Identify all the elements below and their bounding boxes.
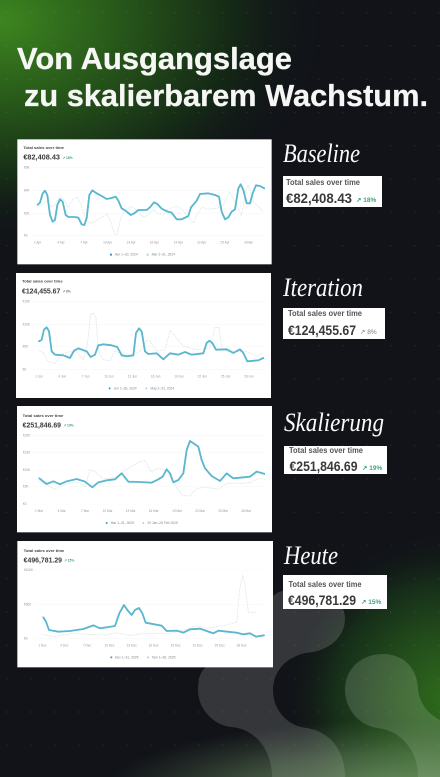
line chart: 16 Mar [149,509,159,513]
title [17,41,428,113]
line chart: 1 Dec [38,643,47,647]
summary box: skalierung [284,445,387,474]
line chart: 22 Dec [193,643,203,647]
summary box: heute: ↗ 15% [361,599,381,606]
line chart: 1 Apr [34,241,41,245]
chart title: Total sales over time [22,280,63,284]
chart value: €124,455.67 [22,288,60,295]
line chart: 25 Mar [218,509,228,513]
summary box: skalierung: €251,846.69 [290,458,358,474]
line chart: €100K [24,568,34,572]
chart title: Total sales over time [24,549,64,553]
line chart: 7 Apr [80,241,88,245]
line chart: 10 Apr [103,241,112,245]
legend: 29 Jan–28 Feb 2025 [147,521,178,525]
legend: Mar 2–31, 2024 [152,253,175,257]
panel: heute chart [17,541,273,667]
line chart: 22 Jun [198,375,207,379]
line chart: 10 Mar [103,509,113,513]
line chart: 19 Dec [171,643,181,647]
line chart: €0 [23,367,26,371]
line chart: €0 [24,234,28,238]
chart change: ↗ 8% [62,290,71,294]
line chart: 7 Jun [82,375,90,379]
title: zu skalierbarem Wachstum. [24,78,428,113]
legend [106,521,178,525]
line chart: 19 Apr [174,241,183,245]
legend: Jun 1–30, 2024 [114,386,137,390]
line chart: 1 Mar [35,509,43,513]
title: Von Ausgangslage [17,41,292,76]
line chart: €10K [23,322,31,326]
panel: skalierung chart [17,406,272,532]
line chart [24,568,265,647]
heading: Baseline: Baseline [283,139,360,168]
line chart: 1 Jun [35,375,43,379]
line chart [23,299,265,379]
summary box: baseline [283,176,382,207]
chart value: €251,846.69 [23,423,61,430]
line chart [23,433,265,513]
line chart: 16 Apr [150,241,159,245]
line chart: 10 Jun [104,375,114,379]
heading: Iteration: Iteration [282,273,363,302]
summary box: iteration: ↗ 8% [360,329,377,336]
line chart: 13 Mar [126,509,136,513]
line chart: 19 Mar [172,509,182,513]
line chart: €15K [23,299,31,303]
legend [110,655,176,659]
line chart: 10 Dec [104,643,115,647]
summary box: iteration: €124,455.67 [288,322,356,338]
line chart: €10K [23,468,31,472]
line chart: 28 Apr [244,241,253,245]
line chart: €0 [23,502,27,506]
line chart: 25 Jun [221,375,231,379]
line chart: 16 Jun [151,375,161,379]
chart change: ↗ 19% [63,424,74,428]
line chart: 4 Mar [58,509,66,513]
line chart: 25 Dec [215,643,225,647]
chart value: €82,408.43 [23,155,60,162]
line chart: 19 Jun [174,375,184,379]
line chart: 22 Mar [195,509,205,513]
line chart: €2K [24,211,31,215]
chart change: ↗ 18% [62,156,73,160]
legend: Dec 1–31, 2025 [115,655,139,659]
line chart: €6K [24,166,31,170]
line chart: 28 Jun [244,375,254,379]
summary box: heute: €496,781.29 [288,592,356,608]
line chart: 28 Mar [241,509,251,513]
summary box: iteration: Total sales over time [288,308,362,318]
summary box: baseline: ↗ 18% [356,197,376,204]
heading: Heute: Heute [283,541,338,570]
chart title: Total sales over time [23,414,63,418]
line chart: 7 Dec [83,643,92,647]
line chart: €4K [24,189,31,193]
summary box: iteration [283,308,385,339]
legend: Nov 1–30, 2025 [152,655,176,659]
line chart: 7 Mar [81,509,89,513]
summary box: skalierung: ↗ 19% [362,465,382,472]
line chart: €15K [23,450,31,454]
line chart [24,166,265,245]
line chart: 13 Jun [128,375,137,379]
line chart: 22 Apr [197,241,206,245]
line chart: 25 Apr [220,241,230,245]
legend: Mar 1–31, 2025 [111,521,134,525]
legend: Apr 1–30, 2024 [115,253,138,257]
legend [109,386,174,390]
summary box: heute: Total sales over time [288,579,362,589]
line chart: 13 Dec [127,643,137,647]
chart value: €496,781.29 [24,557,62,564]
line chart: €20K [23,433,31,437]
line chart: €50K [24,602,32,606]
legend [110,253,175,257]
panel: baseline chart [17,139,272,264]
heading: Skalierung: Skalierung [284,408,384,437]
line chart: €0 [24,636,28,640]
line chart: €5K [23,485,30,489]
chart title: Total sales over time [23,146,64,150]
legend: May 2–31, 2024 [150,386,174,390]
line chart: 4 Dec [60,643,69,647]
summary box: heute [283,575,387,609]
summary box: baseline: €82,408.43 [286,190,352,206]
line chart: 4 Jun [58,375,66,379]
summary box: skalierung: Total sales over time [289,445,363,455]
line chart: 13 Apr [126,241,136,245]
panel: iteration chart [16,273,271,398]
line chart: €5K [23,345,29,349]
line chart: 4 Apr [57,241,65,245]
chart change: ↗ 15% [64,558,74,562]
line chart: 28 Dec [237,643,247,647]
line chart: 16 Dec [149,643,159,647]
summary box: baseline: Total sales over time [286,177,360,187]
